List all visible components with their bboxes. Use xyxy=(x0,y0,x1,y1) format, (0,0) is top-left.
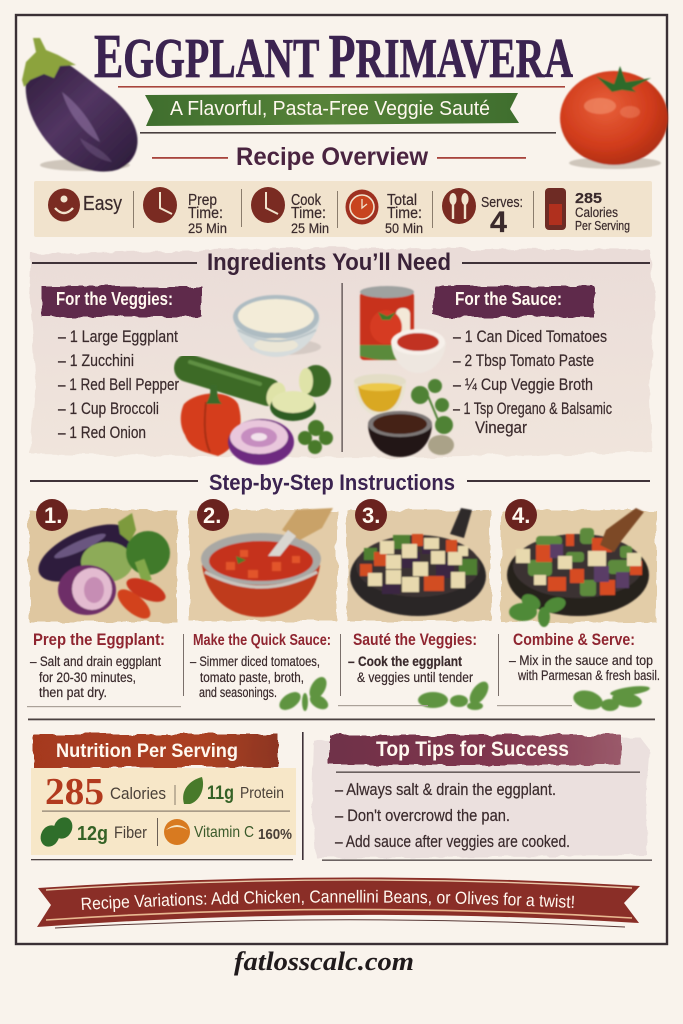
list: veggies xyxy=(58,327,179,442)
icon: easy xyxy=(48,188,80,222)
overview: total time: 50 Min xyxy=(385,220,423,236)
step 3 background and skillet xyxy=(347,508,491,621)
nutrition fiber xyxy=(77,823,147,845)
nutrition values card xyxy=(31,768,296,855)
nutrition calories xyxy=(45,771,166,813)
icon: vitamin c orange xyxy=(164,819,190,845)
overview: cook time: Cook xyxy=(291,192,321,209)
overview: serves: Serves: xyxy=(481,194,523,211)
overview: easy: Easy xyxy=(83,193,122,215)
icon: tomato xyxy=(560,66,668,169)
heading: ingredients: Ingredients You’ll Need xyxy=(207,249,451,276)
badge: for the sauce: For the Sauce: xyxy=(455,289,562,309)
overview: cook time: Time: xyxy=(291,205,326,222)
list: sauce xyxy=(453,327,612,437)
footer website: fatlosscalc.com xyxy=(234,947,414,976)
icon: basil leaves xyxy=(418,678,492,710)
icon: fiber peas xyxy=(37,814,76,850)
step 2 title: Make the Quick Sauce: xyxy=(193,632,331,649)
step 3 title: Sauté the Veggies: xyxy=(353,630,477,649)
title: EGGPLANT PRIMAVERA xyxy=(94,23,573,91)
panel: top tips xyxy=(312,735,652,861)
step 4 text: – Mix in the sauce and top xyxy=(509,653,653,668)
list: veggies: – 1 Large Eggplant xyxy=(58,327,178,346)
list: veggies: – 1 Red Onion xyxy=(58,423,146,442)
step 2 text: – Simmer diced tomatoes, xyxy=(190,654,320,669)
icon: red onion xyxy=(228,419,294,465)
step number 4 xyxy=(505,499,537,531)
nutrition calories: Calories xyxy=(110,784,166,803)
panel: step 3 xyxy=(347,499,492,710)
nutrition fiber: Fiber xyxy=(114,823,147,842)
overview: prep time xyxy=(188,192,227,236)
nutrition protein: 11g xyxy=(207,783,234,804)
step 1 text xyxy=(30,654,161,700)
title rule xyxy=(118,86,565,88)
overview: total time: Time: xyxy=(387,205,422,222)
overview: calories: Calories xyxy=(575,205,618,220)
divider xyxy=(342,283,343,452)
step number 1 xyxy=(36,499,68,531)
list: veggies: – 1 Cup Broccoli xyxy=(58,399,159,418)
heading: recipe overview: Recipe Overview xyxy=(236,143,429,171)
nutrition heading brush xyxy=(33,734,278,767)
badge: for the veggies: For the Veggies: xyxy=(56,289,173,309)
heading: step-by-step instructions: Step-by-Step Instructions xyxy=(209,470,455,495)
step number 2: 2. xyxy=(203,503,221,528)
badge: for the sauce xyxy=(435,286,594,317)
tips list xyxy=(335,780,570,851)
step 4 title: Combine & Serve: xyxy=(513,630,635,649)
tips heading brush xyxy=(329,735,621,765)
banner: recipe variations xyxy=(37,878,640,928)
list: sauce: – ¼ Cup Veggie Broth xyxy=(453,375,593,394)
overview: total time: Total xyxy=(387,192,417,209)
icon: zucchini xyxy=(188,362,331,421)
icon: tomato can xyxy=(360,286,414,360)
list: sauce: – 1 Tsp Oregano & Balsamic xyxy=(453,399,612,418)
step 1 title: Prep the Eggplant: xyxy=(33,630,165,649)
panel: step 2 xyxy=(189,499,337,714)
step 3 text xyxy=(348,654,473,685)
tips list: – Don't overcrowd the pan. xyxy=(335,806,510,825)
overview: total time xyxy=(385,192,423,236)
overview: calories xyxy=(575,190,630,233)
overview: serves xyxy=(481,194,523,239)
nutrition heading brush: Nutrition Per Serving xyxy=(56,741,238,762)
icon: red bell pepper xyxy=(181,385,241,456)
step number 4: 4. xyxy=(512,503,530,528)
step 3 text: – Cook the eggplant xyxy=(348,654,462,669)
icon: herbs xyxy=(411,379,454,455)
icon: prep clock xyxy=(143,187,177,223)
subtitle rule xyxy=(140,132,556,134)
icon: spoons xyxy=(442,188,476,224)
nutrition vitamin c xyxy=(194,824,292,843)
overview: calories: Per Serving xyxy=(575,219,630,233)
list: sauce: – 1 Can Diced Tomatoes xyxy=(453,327,607,346)
step 4 text xyxy=(509,653,660,683)
step 1 text: then pat dry. xyxy=(39,685,107,700)
icon: balsamic bowl xyxy=(368,411,432,457)
nutrition protein: Protein xyxy=(240,785,284,802)
nutrition protein xyxy=(207,783,284,804)
step 1 text: for 20-30 minutes, xyxy=(39,670,136,685)
icon: salt shaker xyxy=(545,188,566,230)
banner: recipe variations: Recipe Variations: Add Chicken, Cannellini Beans, or Olives for a twist! xyxy=(82,890,574,912)
step number 2 xyxy=(197,499,229,531)
icon: basil leaves xyxy=(571,684,650,713)
panel: recipe overview strip xyxy=(34,181,652,239)
subtitle ribbon: A Flavorful, Pasta-Free Veggie Sauté xyxy=(170,98,490,120)
step 1 text: – Salt and drain eggplant xyxy=(30,654,161,669)
panel: step 4 xyxy=(501,499,660,713)
overview: prep time: Time: xyxy=(188,205,223,222)
tips list: – Always salt & drain the eggplant. xyxy=(335,780,556,799)
overview: calories: 285 xyxy=(575,190,602,207)
panel: step 1 xyxy=(29,499,177,700)
step 4 background and skillet xyxy=(501,508,656,627)
list: veggies: – 1 Zucchini xyxy=(58,351,134,370)
panel: ingredients xyxy=(30,248,655,465)
step 2 text: and seasonings. xyxy=(199,685,277,700)
list: sauce: – 2 Tbsp Tomato Paste xyxy=(453,351,594,370)
overview: cook time: 25 Min xyxy=(291,220,329,236)
icon: ramekin of tomato paste xyxy=(391,329,446,373)
nutrition vitamin c: Vitamin C xyxy=(194,824,254,841)
icon: glass bowl of rice xyxy=(233,295,321,357)
nutrition vitamin c: 160% xyxy=(258,826,292,843)
subtitle ribbon xyxy=(145,93,519,126)
list: veggies: – 1 Red Bell Pepper xyxy=(58,375,179,394)
step 1 background and ingredients xyxy=(29,510,177,624)
step 3 text: & veggies until tender xyxy=(357,670,473,685)
overview: prep time: Prep xyxy=(188,192,217,209)
overview: serves: 4 xyxy=(490,206,507,239)
icon: eggplant xyxy=(22,38,138,172)
step 2 background and sauce bowl xyxy=(189,508,337,621)
icon: total time timer xyxy=(346,190,378,224)
nutrition fiber: 12g xyxy=(77,823,108,845)
nutrition calories: 285 xyxy=(45,771,104,813)
step 2 text xyxy=(190,654,320,700)
overview: cook time xyxy=(291,192,329,236)
badge: for the veggies xyxy=(42,286,202,317)
step number 3 xyxy=(355,499,387,531)
icon: parsley xyxy=(298,420,333,454)
tips list: – Add sauce after veggies are cooked. xyxy=(335,832,570,851)
step number 1: 1. xyxy=(44,503,62,528)
step number 3: 3. xyxy=(362,503,380,528)
icon: basil leaves xyxy=(276,674,331,714)
overview: prep time: 25 Min xyxy=(188,220,227,236)
step 2 text: tomato paste, broth, xyxy=(200,670,304,685)
list: sauce: Vinegar xyxy=(475,418,527,437)
icon: cook clock xyxy=(251,187,285,223)
icon: protein pod xyxy=(183,777,203,804)
tips heading brush: Top Tips for Success xyxy=(376,738,569,761)
panel: nutrition xyxy=(31,734,296,860)
icon: glass of oil xyxy=(354,374,406,416)
